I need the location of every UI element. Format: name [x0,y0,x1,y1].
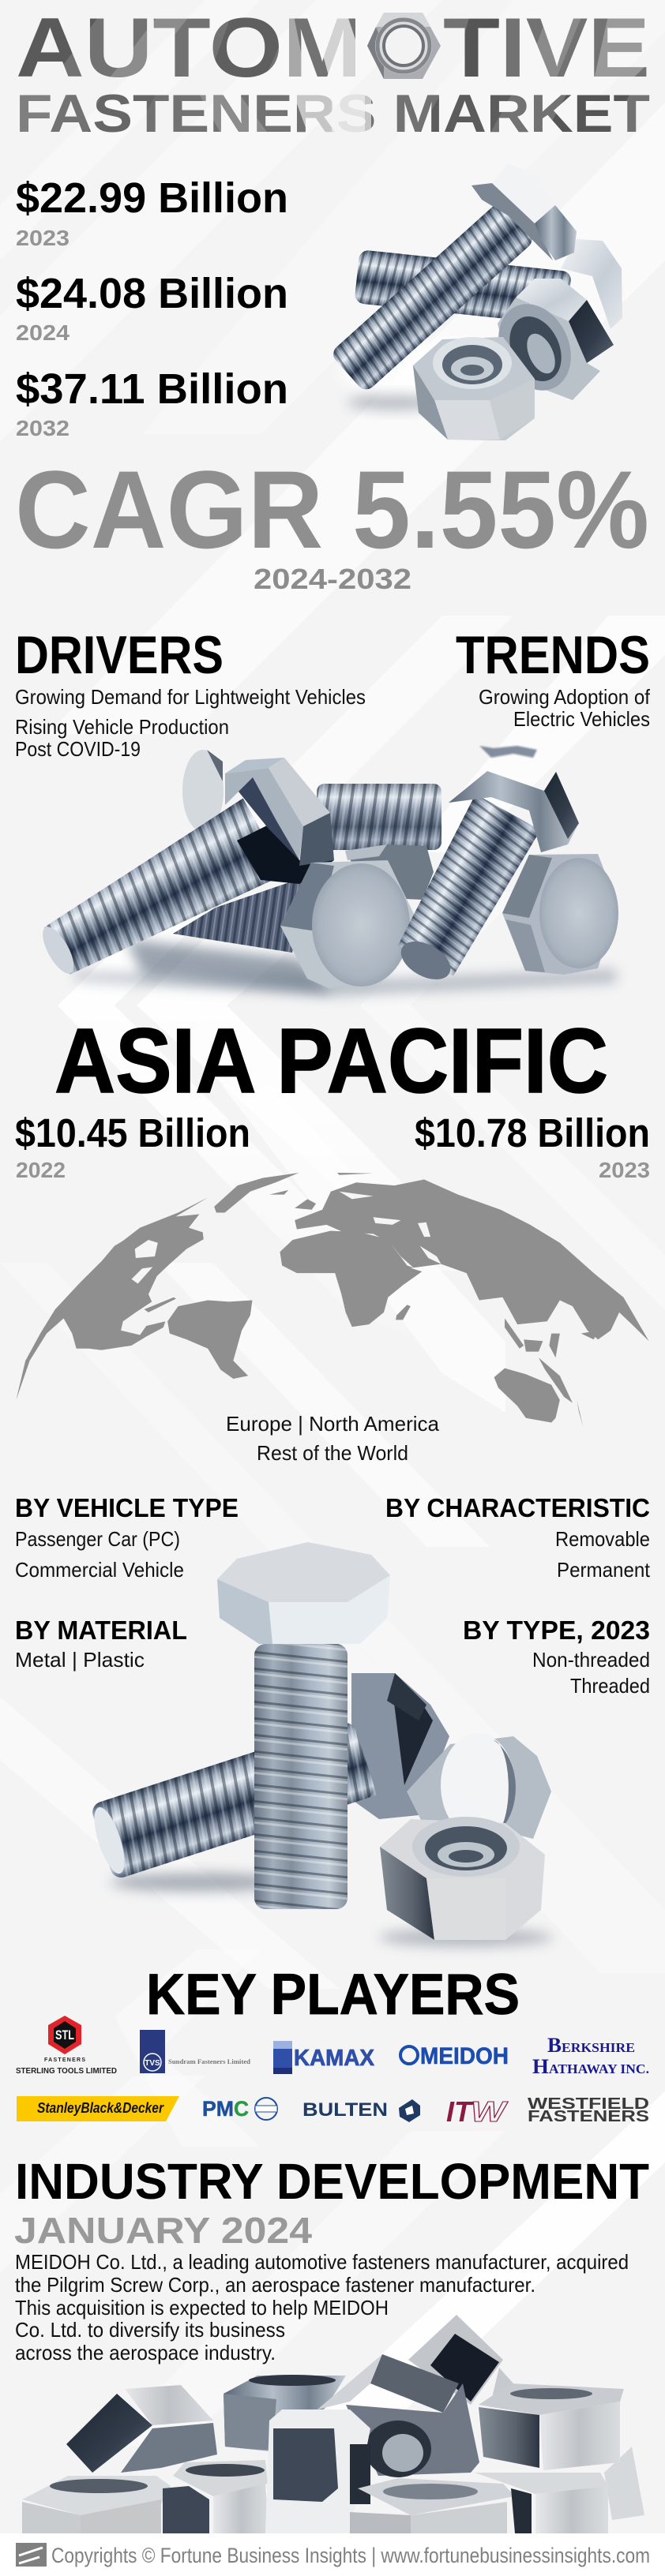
heading: drivers: DRIVERS [15,625,224,685]
top nut [408,2315,521,2407]
market size values [16,174,288,440]
logo: sterling tools [16,2016,117,2076]
trend list: Electric Vehicles [513,707,650,731]
cagr value: CAGR 5.55% [15,447,649,571]
title line 1 [16,0,650,95]
centre nut [317,2354,479,2477]
image: group of bolts [28,746,618,996]
value 2024 [16,270,288,345]
logo: bulten [302,2099,420,2122]
date: JANUARY 2024 [14,2210,312,2251]
footer [0,2533,665,2576]
title line 2: FASTENERS MARKET [16,84,650,144]
image: pile of nuts [22,2315,644,2533]
description: across the aerospace industry. [15,2341,276,2364]
bottom second nut [163,2460,269,2533]
description: the Pilgrim Screw Corp., an aerospace fastener manufacturer. [15,2273,535,2297]
segment list: Metal | Plastic [15,1648,145,1672]
logo: kamax: KAMAX [294,2046,375,2071]
logo: sundram fasteners: Sundram Fasteners Limited [168,2058,251,2065]
cagr period: 2024-2032 [254,563,411,595]
logo: kamax [273,2041,375,2074]
value 2024: $24.08 Billion [16,270,288,317]
heading: asia pacific: ASIA PACIFIC [54,1009,608,1112]
segment list [532,1648,650,1698]
logo: westfield fasteners: WESTFIELD [528,2095,649,2113]
heading: industry development: INDUSTRY DEVELOPMENT [15,2153,649,2210]
driver list: Growing Demand for Lightweight Vehicles [15,685,366,709]
value 2024: 2024 [16,320,70,345]
segment list: Removable [555,1527,650,1551]
logo: itw [446,2095,509,2128]
description: Co. Ltd. to diversify its business [15,2318,285,2342]
segment list [15,1527,184,1582]
segment list: Non-threaded [532,1648,650,1672]
title line 1: TIVE [443,0,650,95]
panel: by material [15,1616,187,1672]
bottom third nut [350,2478,515,2533]
left nut [66,2385,217,2473]
panel: industry development [14,2153,649,2364]
image: bolts and nuts top [329,163,622,440]
image: bolt and nuts [87,1542,553,1947]
panel: asia pacific [15,1009,650,1182]
heading: BY MATERIAL [15,1616,187,1645]
value 2022: $10.45 Billion [15,1110,250,1155]
world map [16,1173,649,1427]
trend list [479,685,651,731]
heading: BY VEHICLE TYPE [15,1493,239,1522]
other regions [226,1412,440,1465]
bottom left nut [22,2476,171,2533]
logo: itw: IT [446,2095,474,2128]
value 2023: $10.78 Billion [415,1110,650,1155]
back centre nut [224,2375,346,2452]
logo: itw: W [471,2095,509,2128]
icon: nut replacing the letter O [367,13,441,79]
driver list [15,685,366,761]
driver list: Rising Vehicle Production [15,715,229,739]
logo: pmc: PM [202,2097,234,2121]
description [15,2250,629,2364]
logo: stanley black and decker: StanleyBlack&Decker [37,2100,164,2116]
segment list: Threaded [570,1674,650,1698]
other regions: Rest of the World [257,1441,408,1465]
driver list: Post COVID-19 [15,737,141,761]
value 2022 [15,1110,250,1182]
description: This acquisition is expected to help MEIDOH [15,2296,389,2320]
logo: sundram fasteners: TVS [145,2059,160,2068]
panel: by type 2023 [463,1616,650,1698]
heading: BY CHARACTERISTIC [385,1493,650,1522]
segment list: Permanent [557,1558,651,1582]
logo: pmc [202,2097,277,2121]
bottom fourth nut [475,2473,608,2533]
description: MEIDOH Co. Ltd., a leading automotive fasteners manufacturer, acquired [15,2250,629,2274]
logo: westfield fasteners: FASTENERS [528,2108,649,2125]
segment list [555,1527,651,1582]
value 2023 [16,174,288,250]
value 2032 [16,365,288,440]
panel: drivers [15,625,366,761]
right nut [479,2383,624,2470]
cagr figure [15,447,649,595]
logo: sterling tools: STL [55,2027,74,2042]
logo: westfield fasteners [528,2095,649,2125]
icon: fortune business insights logo [16,2543,47,2567]
panel: by vehicle type [15,1493,239,1582]
value 2022: 2022 [16,1158,66,1182]
value 2032: 2032 [16,416,70,440]
logo: berkshire hathaway [532,2034,649,2078]
logo: bulten: BULTEN [302,2099,388,2121]
panel: trends [456,625,651,731]
logo: meidoh: MEIDOH [420,2043,509,2069]
value 2023: 2023 [16,226,70,250]
logo: stanley black and decker [17,2096,179,2121]
value 2023: $22.99 Billion [16,174,288,222]
logo: berkshire hathaway: HATHAWAY INC. [532,2055,649,2078]
trend list: Growing Adoption of [479,685,651,709]
panel: key players [16,1963,649,2128]
logo: sterling tools: STERLING TOOLS LIMITED [16,2066,117,2076]
panel: by characteristic [385,1493,651,1582]
logo: pmc: C [234,2097,249,2121]
logo: sterling tools: FASTENERS [44,2057,85,2063]
heading: BY TYPE, 2023 [463,1616,650,1645]
grainy bolt head [265,2409,370,2533]
value 2032: $37.11 Billion [16,365,288,413]
title: automotive fasteners market [16,0,650,144]
segment list: Passenger Car (PC) [15,1527,180,1551]
title line 1: AUTOM [16,0,362,95]
far right nut [604,2447,644,2520]
value 2023: 2023 [599,1158,650,1182]
segment list: Commercial Vehicle [15,1558,184,1582]
logo: sundram fasteners [140,2030,251,2073]
heading: key players: KEY PLAYERS [146,1963,520,2027]
logo: berkshire hathaway: BERKSHIRE [547,2034,635,2057]
other regions: Europe | North America [226,1412,440,1436]
value 2023 [415,1110,650,1182]
